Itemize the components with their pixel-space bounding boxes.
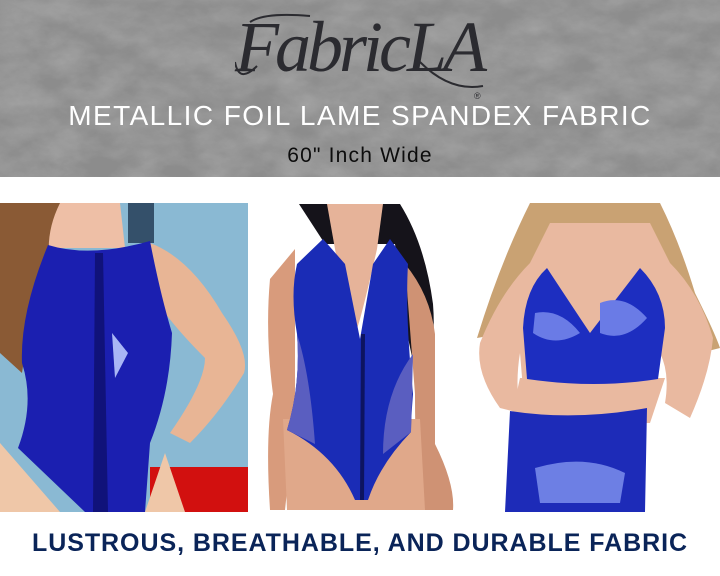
garment <box>18 241 172 512</box>
garment <box>287 239 413 500</box>
logo: FabricLA script wordmark: FabricLA <box>235 7 483 87</box>
title: METALLIC FOIL LAME SPANDEX FABRIC <box>68 100 652 131</box>
photo panel: right two-piece garment on white background <box>477 203 720 512</box>
subtitle: 60" Inch Wide <box>287 144 433 167</box>
arms and legs <box>268 249 295 510</box>
arm and skin <box>150 243 245 443</box>
hair <box>477 203 720 353</box>
skirt <box>505 408 647 512</box>
photo panel: left garment on teal background <box>0 203 248 512</box>
top <box>523 268 665 384</box>
photo panel: centre garment on white background <box>268 204 454 510</box>
hair <box>299 202 434 394</box>
skin <box>479 223 713 418</box>
header banner: grey marble texture <box>0 0 720 177</box>
logo: FabricLA script wordmark: ® <box>474 91 481 101</box>
footer tagline: LUSTROUS, BREATHABLE, AND DURABLE FABRIC <box>32 529 688 557</box>
